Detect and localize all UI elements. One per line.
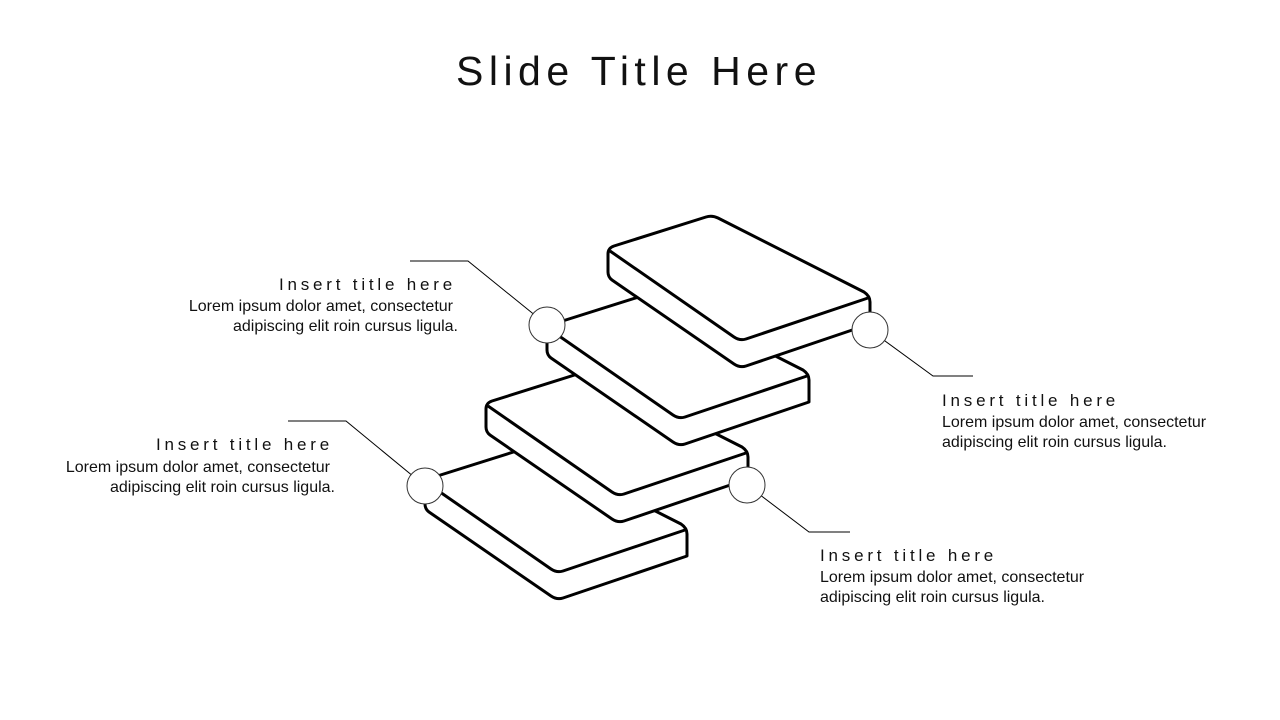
block 2 [486,371,748,522]
block 4 [608,216,870,367]
callout: right: adipiscing elit roin cursus ligula. [942,434,1167,451]
callout: top left: adipiscing elit roin cursus ligula. [233,318,458,335]
callout: bottom right: Lorem ipsum dolor amet, consectetur [820,569,1085,586]
callout: bottom left: adipiscing elit roin cursus ligula. [110,479,335,496]
callout: bottom left: Insert title here [156,435,333,454]
title: Slide Title Here [456,48,822,94]
callout: bottom left [66,435,335,496]
block 1 [425,448,687,599]
callout: bottom right: Insert title here [820,546,997,565]
callout: right: Insert title here [942,391,1119,410]
callout: top left: Lorem ipsum dolor amet, consectetur [189,298,454,315]
callout: bottom right: adipiscing elit roin cursus ligula. [820,589,1045,606]
connector lines [288,261,973,532]
marker circles [407,307,888,504]
callout: bottom left: Lorem ipsum dolor amet, consectetur [66,459,331,476]
block 3 [547,294,809,445]
callout: right: Lorem ipsum dolor amet, consectetur [942,414,1207,431]
stair blocks [425,216,870,599]
callout: top left: Insert title here [279,275,456,294]
callout: bottom right [820,546,1085,606]
callout: top left [189,275,458,335]
callout: right [942,391,1207,451]
